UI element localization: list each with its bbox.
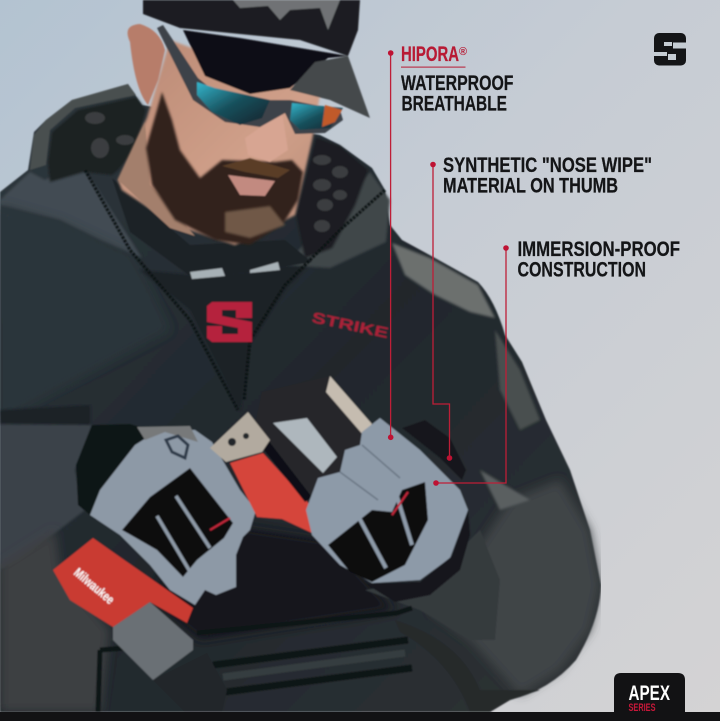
neck shade	[118, 122, 195, 236]
callout line: hipora	[388, 50, 394, 440]
callout: hipora: WATERPROOF	[401, 72, 514, 95]
shirt graphic bits	[190, 262, 280, 279]
hood lining left	[48, 97, 146, 182]
callout line: immersion	[433, 245, 509, 486]
right glove	[306, 418, 468, 583]
callout: nose wipe: SYNTHETIC "NOSE WIPE"	[443, 154, 652, 177]
gearbox	[113, 602, 193, 680]
brand name: Milwaukee	[71, 565, 117, 607]
callout lines and dots	[388, 50, 509, 486]
callout: hipora: HIPORA	[401, 43, 459, 66]
neck and face	[118, 24, 320, 245]
right cuff	[366, 510, 470, 602]
cap logo	[233, 0, 340, 30]
chest logo	[207, 302, 252, 342]
ear	[128, 24, 165, 105]
callout: immersion proof: CONSTRUCTION	[518, 259, 646, 282]
chest brand text: STRIKE	[310, 309, 390, 342]
jacket	[0, 84, 601, 712]
drill housing	[53, 538, 193, 627]
callout: immersion proof: IMMERSION-PROOF	[518, 238, 680, 261]
undershirt	[112, 178, 312, 276]
pocket	[98, 608, 412, 712]
battery	[255, 376, 372, 502]
sunglasses	[157, 25, 343, 134]
series badge: APEX	[628, 682, 670, 705]
series badge: SERIES	[628, 702, 656, 714]
lining honeycomb pattern	[85, 112, 348, 232]
callout: hipora: ®	[459, 46, 467, 58]
callout: hipora	[401, 43, 514, 116]
chuck	[153, 653, 227, 712]
callout: hipora: BREATHABLE	[402, 93, 507, 116]
callout: immersion proof	[518, 238, 680, 282]
hood rim left	[30, 84, 136, 170]
black thumb	[402, 420, 466, 480]
callout: nose wipe	[443, 154, 652, 198]
drill	[53, 538, 227, 712]
cap	[143, 0, 370, 118]
beard	[146, 92, 303, 245]
metal belt clip	[210, 412, 270, 462]
zipper	[85, 170, 385, 410]
nose	[245, 112, 288, 162]
icon: brand S logo	[654, 33, 686, 66]
left glove	[90, 426, 256, 605]
callout: nose wipe: MATERIAL ON THUMB	[443, 175, 618, 198]
left cuff	[76, 424, 150, 520]
drill red body near battery	[230, 453, 312, 533]
callout line: nose wipe	[430, 162, 452, 461]
hood lining right	[296, 137, 368, 258]
series badge	[614, 673, 685, 714]
bottom bar	[0, 712, 720, 721]
